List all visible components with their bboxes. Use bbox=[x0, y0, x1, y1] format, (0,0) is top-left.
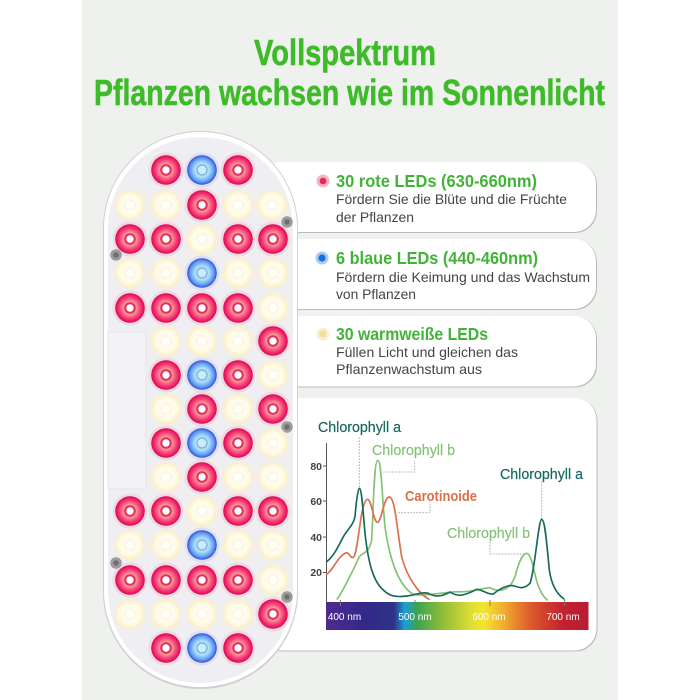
wavelength labels: 400 nm bbox=[328, 612, 361, 623]
panel: absorption chart bbox=[260, 398, 598, 652]
text: red LEDs: 30 rote LEDs (630-660nm) bbox=[336, 171, 537, 191]
wavelength labels: 700 nm bbox=[546, 612, 580, 623]
text: blue LEDs bbox=[336, 248, 590, 302]
icon: blue dot bbox=[316, 252, 328, 264]
curve labels: Chlorophyll b bbox=[447, 526, 530, 542]
curve labels: Carotinoide bbox=[405, 489, 477, 505]
wavelength labels: 500 nm bbox=[398, 612, 432, 623]
text: warm white LEDs: 30 warmweiße LEDs bbox=[336, 324, 488, 344]
panel: blue LEDs bbox=[260, 239, 597, 310]
dashed leader lines bbox=[359, 437, 542, 554]
curve: carotenoids bbox=[327, 497, 429, 599]
wavelength labels: 600 nm bbox=[472, 612, 506, 623]
LED grid bbox=[112, 152, 290, 666]
curve labels bbox=[318, 420, 584, 542]
y axis labels: 60 bbox=[310, 496, 322, 508]
text: blue LEDs: Fördern die Keimung und das Wachstum bbox=[336, 269, 590, 285]
curve labels: Chlorophyll a bbox=[500, 467, 584, 483]
panel: red LEDs bbox=[260, 162, 597, 233]
text: warm white LEDs: Pflanzenwachstum aus bbox=[336, 361, 482, 377]
y axis labels: 80 bbox=[310, 461, 322, 473]
icon: red dot bbox=[316, 174, 330, 188]
page background panel bbox=[82, 0, 618, 700]
text: red LEDs: der Pflanzen bbox=[336, 209, 414, 225]
text: red LEDs: Fördern Sie die Blüte und die Früchte bbox=[336, 191, 567, 207]
title: Vollspektrum bbox=[254, 32, 436, 73]
spectrum bar bbox=[326, 602, 588, 630]
y axis labels: 20 bbox=[310, 567, 322, 579]
text: red LEDs bbox=[336, 171, 567, 225]
panel: warm white LEDs bbox=[260, 316, 597, 388]
text: warm white LEDs: Füllen Licht und gleichen das bbox=[336, 344, 518, 360]
text: blue LEDs: 6 blaue LEDs (440-460nm) bbox=[336, 248, 538, 268]
driver cover bbox=[108, 332, 146, 489]
curve: chlorophyll a bbox=[327, 488, 564, 599]
screws bbox=[110, 216, 293, 603]
curve labels: Chlorophyll b bbox=[372, 443, 455, 459]
icon: warm white dot bbox=[316, 328, 330, 340]
text: blue LEDs: von Pflanzen bbox=[336, 286, 416, 302]
curve labels: Chlorophyll a bbox=[318, 420, 402, 436]
wavelength labels bbox=[328, 612, 580, 623]
y axis labels: 40 bbox=[310, 532, 322, 544]
y axis labels bbox=[310, 461, 322, 579]
LED panel housing bbox=[103, 131, 298, 689]
title bbox=[94, 32, 605, 113]
curve: chlorophyll b bbox=[337, 460, 547, 600]
chart axes bbox=[323, 443, 564, 606]
text: warm white LEDs bbox=[336, 324, 518, 377]
